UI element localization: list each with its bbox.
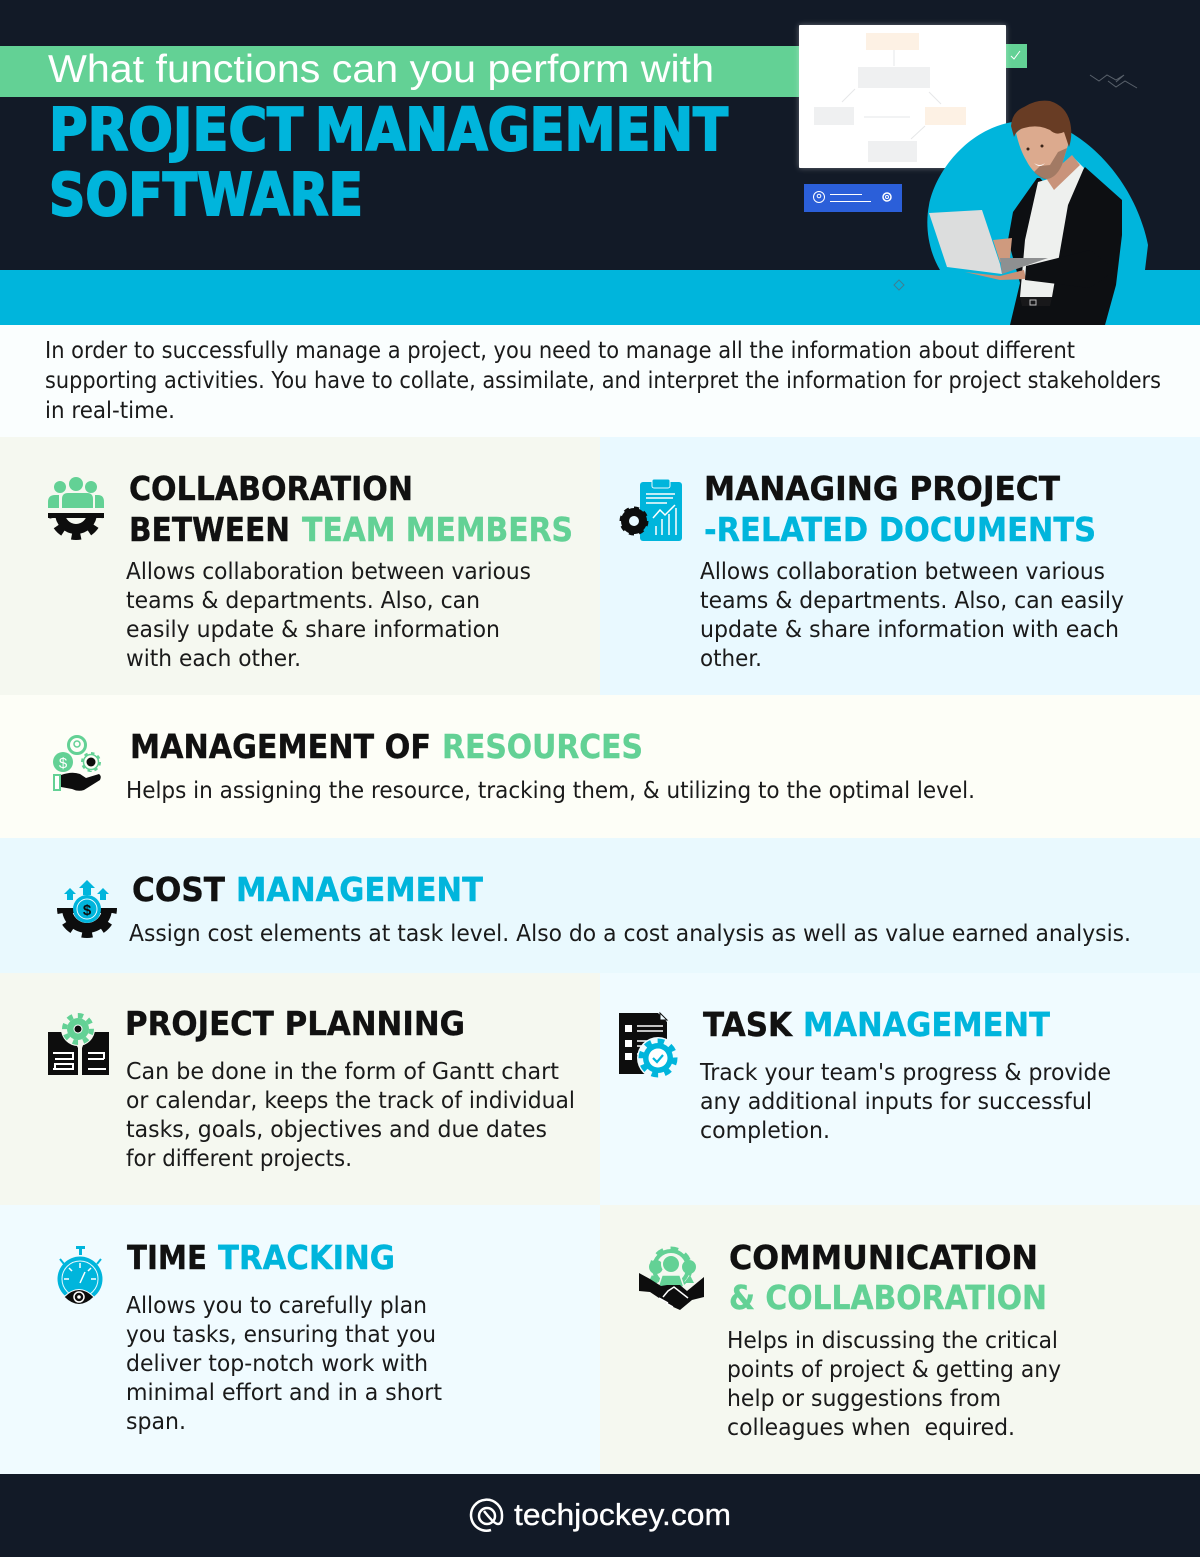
- main title: MANAGEMENT: [315, 95, 728, 164]
- sleeve: [1025, 250, 1116, 288]
- face: [1016, 126, 1068, 179]
- body text: tasks, goals, objectives and due dates: [126, 1117, 547, 1143]
- body text: [699, 1060, 1111, 1144]
- heading: COLLABORATION: [129, 469, 413, 508]
- panel: management of resources: [0, 695, 1200, 838]
- panel: managing project-related documents: [600, 437, 1200, 695]
- body text: [727, 1328, 1061, 1441]
- neck: [1046, 155, 1080, 190]
- icon: gear with dollar and arrows: [58, 880, 115, 935]
- body text: Allows collaboration between various: [126, 559, 531, 585]
- icon: checklist and gear: [619, 1013, 679, 1079]
- blue user bar: [804, 184, 902, 212]
- body text: [126, 1293, 442, 1435]
- panel: cost management: [0, 838, 1200, 973]
- panel: time tracking: [0, 1205, 600, 1474]
- body text: any additional inputs for successful: [700, 1089, 1092, 1115]
- icon: clipboard chart and gear: [622, 479, 682, 541]
- icon: team and gear: [48, 477, 104, 536]
- body text: help or suggestions from: [727, 1386, 1001, 1412]
- heading: [129, 469, 573, 549]
- heading: & COLLABORATION: [729, 1278, 1047, 1317]
- hands: [993, 238, 1012, 262]
- website: techjockey.com: [514, 1497, 731, 1532]
- panel: communication and collaboration: [600, 1205, 1200, 1474]
- body text: Assign cost elements at task level. Also do a cost analysis as well as value earned analysis.: [129, 921, 1131, 947]
- heading: PROJECT PLANNING: [125, 1004, 465, 1043]
- icon: team and handshake: [639, 1248, 704, 1310]
- heading: [703, 1005, 1050, 1044]
- heading: [729, 1238, 1047, 1317]
- zigzag decoration: [1090, 75, 1137, 88]
- icon: gear and planner: [48, 1012, 109, 1075]
- body text: [126, 559, 531, 672]
- body text: points of project & getting any: [727, 1357, 1061, 1383]
- heading: [704, 469, 1096, 549]
- body text: easily update & share information: [126, 617, 500, 643]
- heading: [127, 1238, 395, 1277]
- body text: [126, 1059, 575, 1172]
- shirt: [1020, 157, 1084, 297]
- heading: [132, 870, 483, 909]
- panel: project planning: [0, 973, 600, 1205]
- icon: at sign: [471, 1500, 502, 1531]
- heading: MANAGEMENT: [803, 1005, 1050, 1044]
- panel: intro: [0, 325, 1200, 437]
- heading: RESOURCES: [442, 727, 643, 766]
- hair: [1011, 101, 1071, 147]
- body text: minimal effort and in a short: [126, 1380, 442, 1406]
- main title: PROJECT: [49, 95, 303, 164]
- body text: for different projects.: [126, 1146, 352, 1172]
- heading: BETWEEN: [129, 510, 290, 549]
- heading: COMMUNICATION: [729, 1238, 1038, 1277]
- icon: gear with dollar and arrows: $: [83, 902, 92, 919]
- body text: deliver top-notch work with: [126, 1351, 428, 1377]
- heading: TASK: [703, 1005, 793, 1044]
- heading: TEAM MEMBERS: [302, 510, 573, 549]
- body text: other.: [700, 646, 762, 672]
- flowchart whiteboard: [799, 25, 1006, 168]
- body text: Track your team's progress & provide: [699, 1060, 1111, 1086]
- body text: span.: [126, 1409, 186, 1435]
- panel: collaboration between team members: [0, 437, 600, 695]
- main title: [49, 95, 728, 229]
- body text: or calendar, keeps the track of individual: [126, 1088, 575, 1114]
- main title: SOFTWARE: [49, 160, 363, 229]
- heading: TIME: [127, 1238, 207, 1277]
- body text: Helps in assigning the resource, tracking them, & utilizing to the optimal level.: [126, 778, 975, 804]
- body text: teams & departments. Also, can: [126, 588, 480, 614]
- body text: teams & departments. Also, can easily: [700, 588, 1124, 614]
- body text: you tasks, ensuring that you: [126, 1322, 436, 1348]
- subtitle: What functions can you perform with: [48, 48, 714, 91]
- body text: Helps in discussing the critical: [727, 1328, 1058, 1354]
- body text: completion.: [700, 1118, 830, 1144]
- jacket: [1008, 167, 1122, 325]
- icon: green check tag: [1006, 44, 1027, 68]
- body text: colleagues when equired.: [727, 1415, 1015, 1441]
- green title band: [0, 46, 800, 97]
- icon: stopwatch and eye: [58, 1246, 102, 1304]
- panel: task management: [600, 973, 1200, 1205]
- body text: Can be done in the form of Gantt chart: [126, 1059, 559, 1085]
- panel: intro: in real-time.: [45, 398, 175, 424]
- body text: update & share information with each: [700, 617, 1119, 643]
- footer: [0, 1474, 1200, 1557]
- laptop: [929, 210, 1002, 274]
- heading: COST: [132, 870, 225, 909]
- heading: TRACKING: [218, 1238, 395, 1277]
- heading: MANAGING PROJECT: [704, 469, 1060, 508]
- heading: [130, 727, 643, 766]
- heading: MANAGEMENT: [236, 870, 483, 909]
- body text: [700, 559, 1124, 672]
- person with laptop: [929, 101, 1122, 325]
- diamond decoration: [894, 280, 904, 290]
- belt: [1020, 297, 1052, 306]
- body text: Allows collaboration between various: [700, 559, 1105, 585]
- heading: -RELATED DOCUMENTS: [704, 510, 1096, 549]
- icon: hand with resources: [53, 736, 101, 791]
- heading: MANAGEMENT OF: [130, 727, 431, 766]
- panel: intro: In order to successfully manage a project, you need to manage all the information about different: [45, 338, 1075, 364]
- body text: with each other.: [126, 646, 301, 672]
- icon: hand with resources: $: [59, 755, 68, 772]
- teal blob behind person: [927, 120, 1148, 280]
- body text: Allows you to carefully plan: [126, 1293, 427, 1319]
- header panel: [0, 0, 1200, 325]
